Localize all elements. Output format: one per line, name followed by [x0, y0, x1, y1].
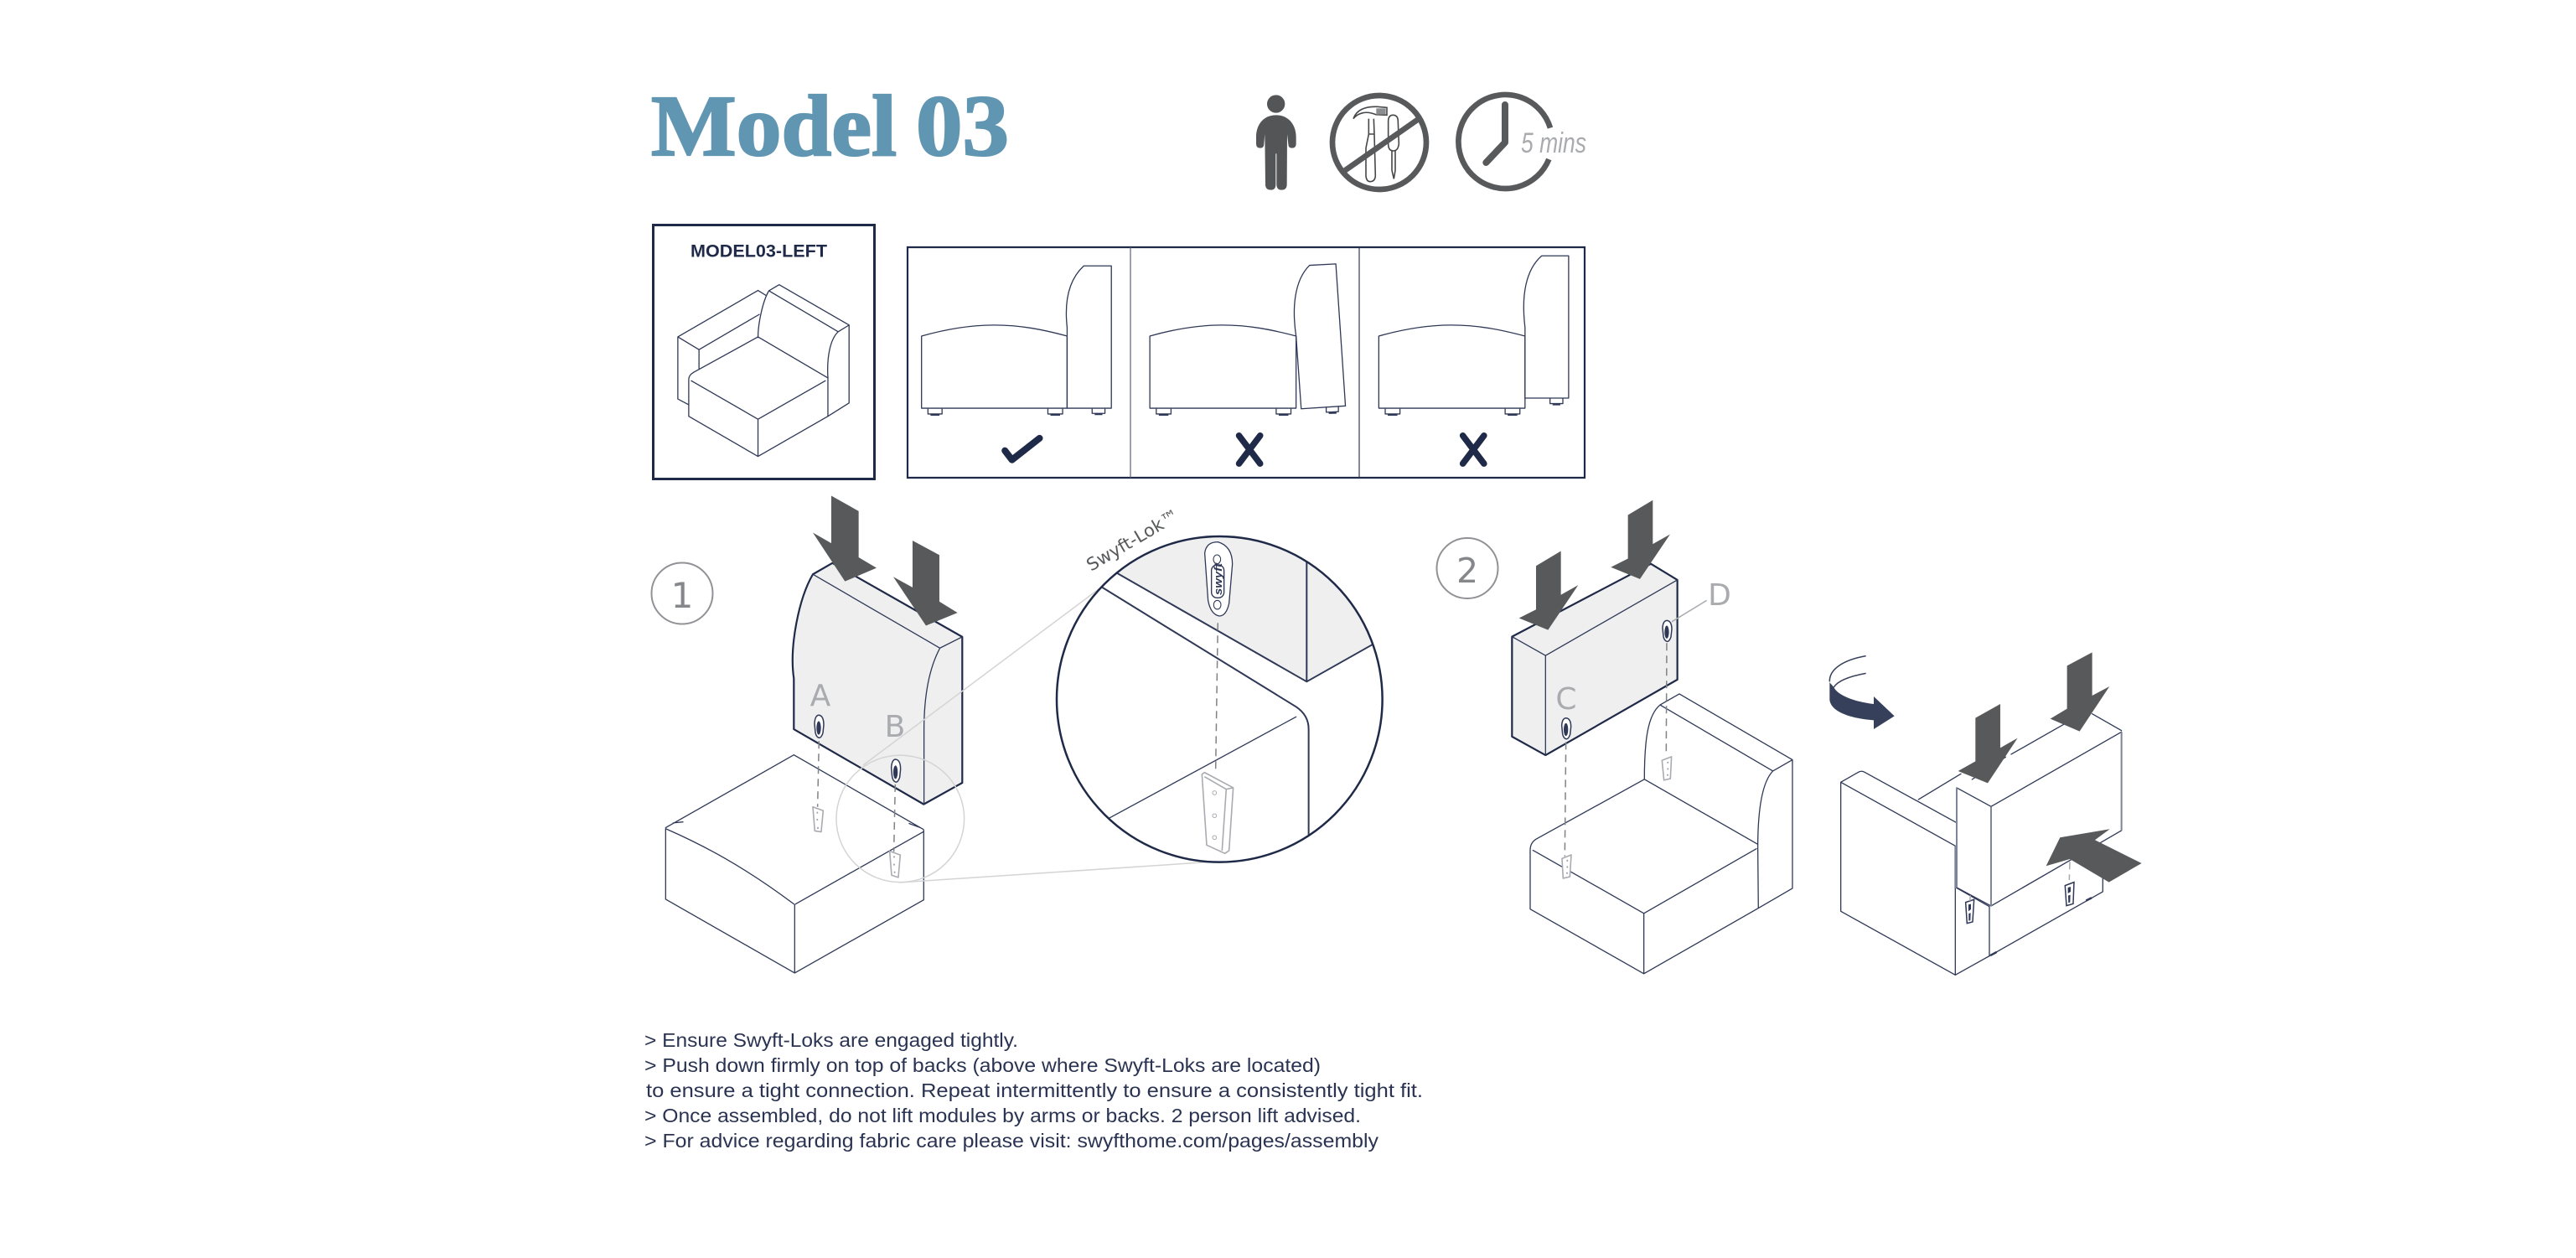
dashed guide	[1216, 623, 1218, 771]
detachable back	[793, 563, 962, 805]
icon: one person	[1256, 95, 1296, 190]
title: Model	[651, 78, 897, 174]
dashed alignment guides	[818, 741, 895, 852]
bracket C	[1562, 855, 1571, 878]
bracket D	[1662, 757, 1672, 780]
arrow: push down right	[1611, 500, 1670, 579]
isometric sofa module	[678, 285, 849, 457]
seat module	[665, 755, 923, 973]
bracket right	[2065, 883, 2074, 906]
sofa module rear	[1841, 714, 2122, 975]
bracket close-up	[1202, 773, 1234, 853]
dashed alignment guides	[1565, 643, 1667, 857]
detail circle: Swyft-Lok close-up	[1056, 535, 1384, 863]
Swyft-Lok label: Swyft-Lok™	[1083, 505, 1182, 575]
module name: MODEL03-LEFT	[691, 241, 827, 261]
Swyft-Lok D	[1663, 620, 1672, 641]
icon: no tools required	[1332, 96, 1426, 189]
bracket A	[813, 807, 823, 832]
Swyft-Lok B	[892, 759, 901, 782]
title	[651, 78, 1009, 174]
armless seat module with back	[1530, 694, 1792, 974]
step 1 illustration	[665, 495, 965, 973]
icon: clock	[1458, 95, 1550, 189]
time label: 5 mins	[1521, 127, 1586, 159]
instructions text: > Once assembled, do not lift modules by arms or backs. 2 person lift advised.	[644, 1105, 1361, 1126]
label B: B	[885, 710, 905, 744]
diagram: back tilted	[1150, 264, 1346, 463]
arrow: push in	[2046, 829, 2142, 883]
label D: D	[1708, 578, 1731, 613]
icon: cross	[1239, 436, 1260, 463]
diagram: back raised	[1379, 256, 1569, 463]
instructions text	[644, 1029, 1423, 1152]
Swyft-Lok C	[1562, 718, 1571, 739]
instructions text: > Ensure Swyft-Loks are engaged tightly.	[644, 1029, 1018, 1051]
arrow: push down right	[893, 541, 958, 625]
Swyft-Lok plate	[1205, 542, 1233, 616]
icon: check mark	[1005, 438, 1040, 460]
icon: cross	[1463, 436, 1484, 463]
bracket left	[1966, 899, 1974, 924]
zoom leader lines	[863, 587, 1215, 883]
arrow: rotate	[1829, 656, 1895, 729]
label C: C	[1555, 682, 1577, 717]
instructions text: > Push down firmly on top of backs (above where Swyft-Loks are located)	[644, 1054, 1321, 1076]
arrow: push down left	[813, 495, 877, 582]
step 2 rotated assembled view	[1829, 652, 2142, 975]
arrow: push down right	[2051, 652, 2109, 732]
zoom guide circle	[836, 755, 965, 883]
lower seat base	[1956, 877, 2103, 956]
panel: module identification	[654, 225, 875, 479]
logo on Swyft-Lok: swyft	[1212, 562, 1224, 595]
panel: correct and incorrect fit comparison	[908, 247, 1585, 478]
title: 03	[916, 78, 1009, 174]
arrow: push down left	[1958, 704, 2018, 783]
label A: A	[810, 679, 831, 713]
instructions text: > For advice regarding fabric care please visit: swyfthome.com/pages/assembly	[644, 1130, 1379, 1152]
instructions text: to ensure a tight connection. Repeat intermittently to ensure a consistently tight fit.	[646, 1079, 1423, 1101]
Swyft-Lok A	[815, 715, 824, 738]
step 1 badge	[652, 563, 712, 624]
step 1 badge: 1	[671, 575, 693, 616]
step 2 badge	[1436, 538, 1498, 598]
diagram: correct fit	[922, 266, 1111, 460]
bracket B	[890, 852, 900, 877]
detachable arm	[1512, 564, 1678, 755]
label D leader	[1672, 600, 1707, 622]
back block	[1957, 732, 2122, 906]
arrow: push down left	[1519, 551, 1578, 630]
step 2 badge: 2	[1456, 551, 1478, 591]
step 2 illustration	[1512, 500, 1792, 974]
